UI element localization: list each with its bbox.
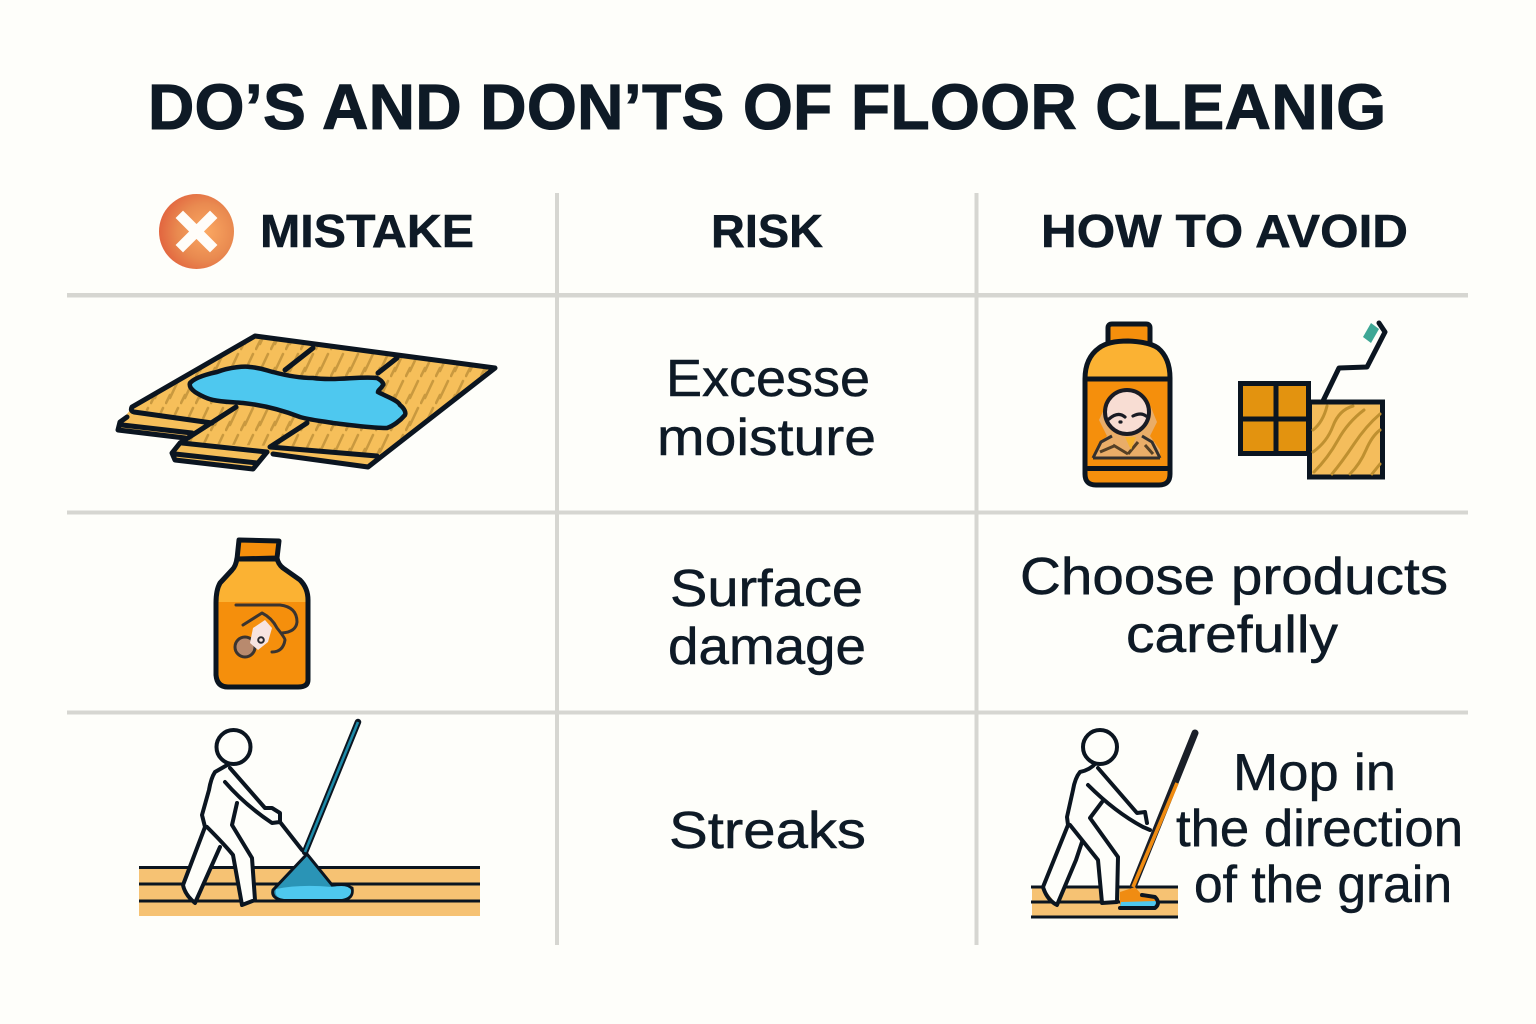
text: excesse moisture: Excesse [666, 350, 870, 408]
heading: risk: RISK [711, 205, 823, 257]
text: surface damage: damage [668, 618, 866, 676]
text: mop in the direction of the grain: Mop in [1233, 744, 1396, 802]
heading: mistake: MISTAKE [260, 205, 474, 257]
icon: floor sample tiles with brush [1240, 323, 1385, 477]
icon: red cross badge [159, 194, 234, 269]
text: surface damage: Surface [670, 560, 863, 618]
text: excesse moisture: moisture [657, 409, 876, 467]
text: mop in the direction of the grain: the direction [1176, 800, 1463, 858]
icon: wet wood floor with puddle [118, 336, 495, 469]
icon: orange bottle with portrait label [1085, 324, 1170, 485]
icon: person mopping against the grain [139, 722, 480, 916]
text: mop in the direction of the grain: of the grain [1194, 856, 1452, 914]
text: choose products carefully: carefully [1126, 606, 1338, 664]
text: mop in the direction of the grain [1176, 744, 1463, 914]
heading: how to avoid: HOW TO AVOID [1041, 205, 1408, 257]
icon: person mopping with the grain [1031, 730, 1195, 918]
text: streaks: Streaks [669, 802, 866, 860]
icon: chemical bottle [216, 540, 308, 687]
title: DO’S AND DON’TS OF FLOOR CLEANIG [148, 71, 1386, 143]
text: choose products carefully [1020, 548, 1448, 664]
text: excesse moisture [657, 350, 876, 467]
text: surface damage [668, 560, 866, 676]
text: choose products carefully: Choose products [1020, 548, 1448, 606]
